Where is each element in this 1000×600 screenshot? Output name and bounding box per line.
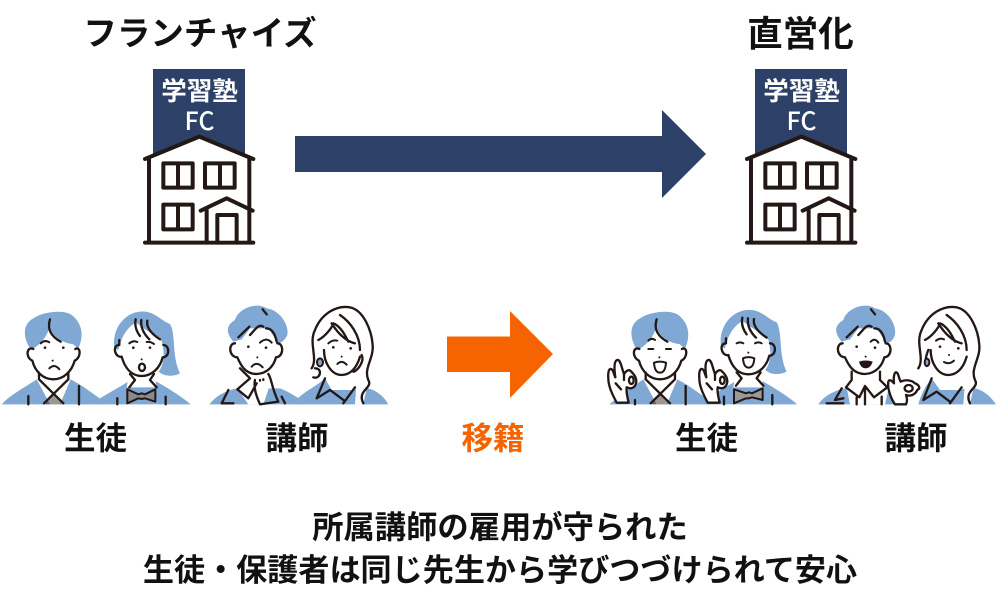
icon: directly managed school building <box>747 69 855 243</box>
school sign: 学習塾 <box>763 78 840 106</box>
label: transfer: 移籍 <box>461 420 525 456</box>
label: instructors before: 講師 <box>265 420 329 456</box>
house <box>747 137 855 243</box>
caption: 生徒・保護者は同じ先生から学びつづけられて安心 <box>143 553 857 588</box>
caption: 所属講師の雇用が守られた <box>312 509 688 545</box>
female student <box>702 310 797 404</box>
heading: franchise: フランチャイズ <box>83 15 317 53</box>
illustration: happy students <box>608 310 797 404</box>
school sign: FC <box>786 102 817 138</box>
school sign: FC <box>184 102 215 138</box>
house <box>145 137 253 243</box>
male student <box>2 312 103 404</box>
caption <box>143 509 857 588</box>
icon: franchise school building <box>145 69 253 243</box>
male student <box>609 312 710 404</box>
school sign: 学習塾 <box>161 78 238 106</box>
arrow: transfer <box>447 311 553 398</box>
OK hand <box>888 372 919 404</box>
female instructor <box>295 307 388 404</box>
heading: directly managed: 直営化 <box>747 14 854 54</box>
school sign <box>153 69 245 159</box>
male instructor <box>209 306 302 404</box>
male instructor <box>818 306 903 404</box>
female student <box>95 311 191 404</box>
label: students after: 生徒 <box>675 420 738 456</box>
illustration: worried students <box>2 311 191 404</box>
OK hand <box>699 360 727 403</box>
label: instructors after: 講師 <box>884 420 948 456</box>
illustration: happy instructors <box>818 306 996 404</box>
illustration: worried instructors <box>209 306 388 404</box>
label: students before: 生徒 <box>64 420 127 456</box>
arrow: franchise to direct management <box>295 110 706 198</box>
OK hand <box>608 360 636 403</box>
school sign <box>755 69 847 159</box>
female instructor <box>918 307 996 404</box>
